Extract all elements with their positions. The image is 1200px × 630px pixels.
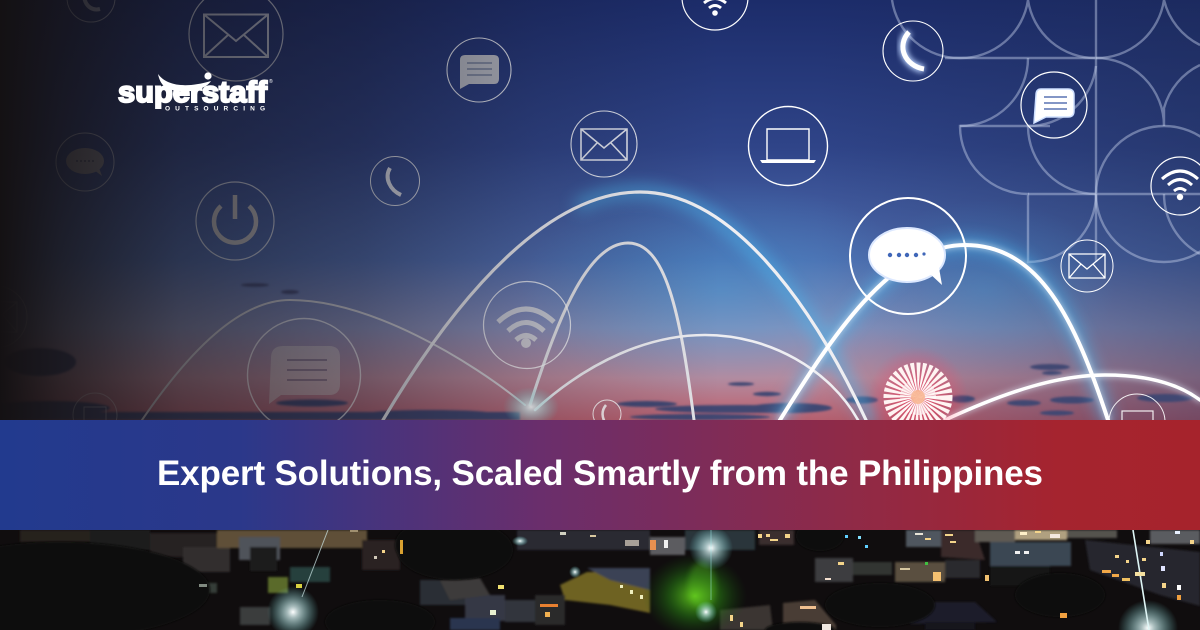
icon: power button [196, 182, 274, 260]
icon: wifi, right [1151, 157, 1200, 215]
icon: document, lower right [1109, 394, 1166, 420]
background: evening sky [0, 0, 1200, 420]
glowing node on the horizon [506, 389, 556, 420]
icon: phone, left centre [370, 156, 420, 206]
icon: tiny phone [592, 400, 622, 420]
title banner [0, 420, 1200, 530]
clouds on the horizon [0, 283, 1193, 420]
logo: SuperStaff Outsourcing [118, 72, 273, 112]
logo swoosh [158, 74, 211, 92]
window lights [199, 530, 1194, 630]
icon: large chat bubble with dots [850, 198, 966, 314]
icon: chat lines, right [1021, 72, 1087, 138]
light beams [1133, 530, 1149, 630]
icon: wifi, centre [484, 282, 570, 368]
logo strapline: OUTSOURCING [165, 106, 265, 112]
dark tree masses [24, 538, 1049, 630]
banner headline: Expert Solutions, Scaled Smartly from the Philippines [157, 454, 1043, 493]
green tree glow [648, 558, 742, 630]
icon: phone, top left [67, 0, 115, 22]
icon: chat dots, left [56, 133, 114, 191]
buildings and houses [20, 530, 1200, 630]
communication icons [56, 0, 1200, 420]
icon: envelope, small right [1061, 240, 1113, 292]
night city band [20, 530, 1200, 630]
arc: low centre [535, 335, 858, 420]
logo wordmark: superstaff [118, 76, 268, 109]
arc: right bright [780, 245, 1108, 420]
icon: phone, top right [883, 21, 943, 81]
icon: wifi, top [682, 0, 748, 30]
network arcs [142, 192, 1200, 420]
registered mark: ® [269, 78, 273, 85]
icon: envelope, large [189, 0, 283, 81]
fireworks burst [871, 352, 965, 420]
icon: laptop [748, 106, 828, 186]
arc: large peak [383, 192, 866, 420]
decorative scalloped pattern [892, 0, 1200, 262]
icon: chat lines, lower left [248, 318, 360, 432]
icon: chat lines, top centre [447, 38, 511, 102]
icon: envelope, left edge [0, 286, 27, 348]
icon: envelope, centre [571, 111, 637, 177]
icon: small square, lower left [72, 392, 118, 420]
arc: far right [945, 375, 1200, 420]
left-side darkening overlay [0, 0, 1200, 420]
arc: wide left [142, 300, 525, 420]
street light glows [267, 586, 319, 630]
arc: tall centre [530, 243, 694, 420]
